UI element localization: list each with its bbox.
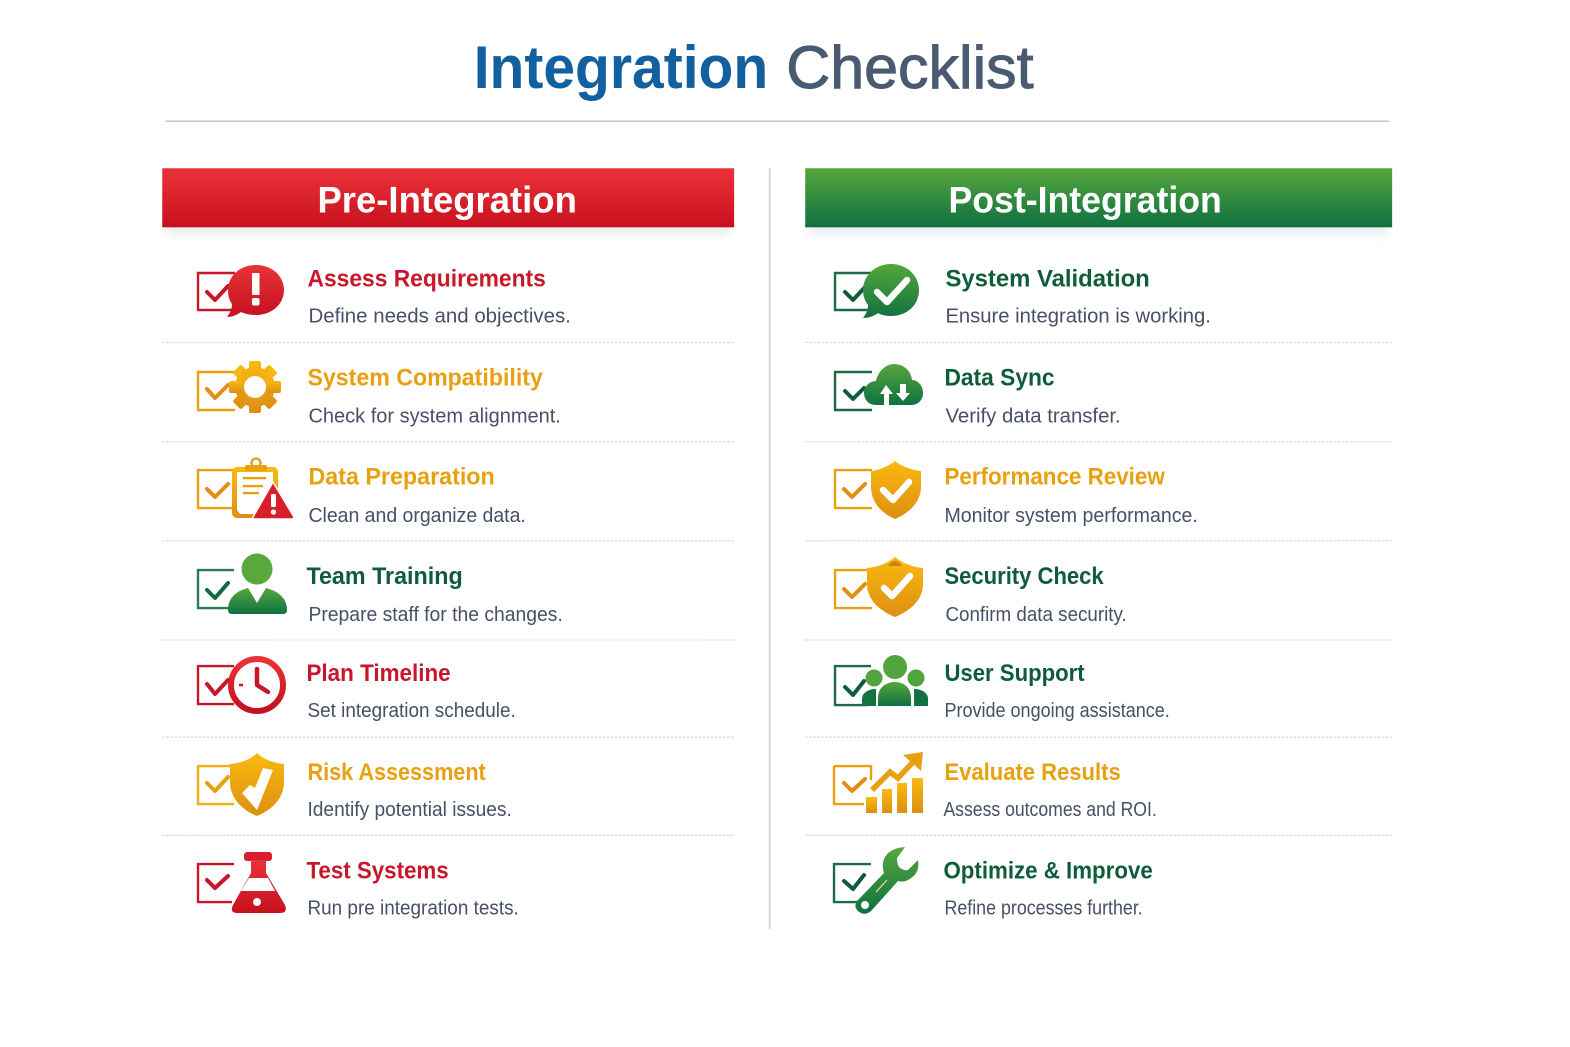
icon: clock <box>198 659 283 711</box>
item: Risk Assessment: Identify potential issues. <box>307 798 512 821</box>
item: Security Check: Confirm data security. <box>945 603 1127 626</box>
item: Test Systems: Run pre integration tests. <box>307 896 519 919</box>
item: Evaluate Results <box>834 752 1157 821</box>
item: Data Sync: Data Sync <box>944 365 1055 392</box>
icon: flask <box>198 852 286 913</box>
header: Post-Integration: Post-Integration <box>948 178 1222 220</box>
item: Optimize & Improve <box>834 847 1153 919</box>
item: User Support: Provide ongoing assistance. <box>944 699 1170 722</box>
item: Plan Timeline: Plan Timeline <box>306 660 451 687</box>
panel: post-integration list <box>834 264 1211 919</box>
item: System Validation <box>835 264 1211 327</box>
icon: wrench <box>834 847 918 914</box>
icon: clipboard with warning <box>198 459 294 519</box>
item: Team Training <box>198 554 563 626</box>
icon: shield <box>198 753 284 816</box>
item: Assess Requirements <box>198 265 571 327</box>
icon: group of people <box>835 655 928 706</box>
item: Data Preparation <box>198 459 526 527</box>
item: System Validation: System Validation <box>945 265 1150 292</box>
item: Test Systems: Test Systems <box>306 857 449 884</box>
header: Pre-Integration <box>162 168 734 234</box>
icon: security shield <box>835 557 923 617</box>
item: Risk Assessment <box>198 753 512 821</box>
item: Plan Timeline <box>198 659 516 722</box>
item: Data Preparation: Clean and organize data. <box>308 504 526 527</box>
item: System Compatibility: System Compatibility <box>307 365 543 392</box>
item: Data Preparation: Data Preparation <box>308 464 495 491</box>
item: Data Sync <box>835 364 1121 428</box>
item: Performance Review: Performance Review <box>944 464 1165 491</box>
item: Optimize & Improve: Refine processes further. <box>944 896 1143 919</box>
icon: person <box>198 554 287 614</box>
item: Performance Review <box>835 461 1198 527</box>
panel: pre-integration list <box>198 265 571 919</box>
item: Security Check: Security Check <box>944 563 1104 590</box>
item: User Support: User Support <box>944 660 1085 687</box>
header: Post-Integration <box>805 168 1392 234</box>
item: Security Check <box>835 557 1127 626</box>
item: Plan Timeline: Set integration schedule. <box>307 699 516 722</box>
item: Evaluate Results: Assess outcomes and ROI. <box>943 798 1157 821</box>
icon: cloud with arrows <box>835 364 923 410</box>
item: Risk Assessment: Risk Assessment <box>307 759 486 786</box>
header: Pre-Integration: Pre-Integration <box>317 178 577 220</box>
item: Data Sync: Verify data transfer. <box>945 405 1121 428</box>
title: Integration <box>474 34 768 101</box>
title <box>474 34 1034 101</box>
icon: check speech bubble <box>835 264 919 318</box>
title: Checklist <box>786 34 1034 101</box>
icon: alert speech bubble <box>198 265 284 317</box>
item: Assess Requirements: Define needs and objectives. <box>308 304 571 327</box>
item: Assess Requirements: Assess Requirements <box>307 265 546 292</box>
item: System Validation: Ensure integration is working. <box>945 304 1211 327</box>
item: Test Systems <box>198 852 519 919</box>
item: Team Training: Team Training <box>306 563 463 590</box>
item: System Compatibility: Check for system alignment. <box>308 405 561 428</box>
icon: gear <box>198 361 281 413</box>
icon: shield <box>835 461 921 519</box>
item: Team Training: Prepare staff for the changes. <box>308 603 563 626</box>
item: Optimize & Improve: Optimize & Improve <box>943 857 1153 884</box>
item: User Support <box>835 655 1170 722</box>
icon: rising bar chart <box>834 752 923 813</box>
item: Evaluate Results: Evaluate Results <box>944 759 1121 786</box>
item: Performance Review: Monitor system performance. <box>944 504 1198 527</box>
item: System Compatibility <box>198 361 561 428</box>
